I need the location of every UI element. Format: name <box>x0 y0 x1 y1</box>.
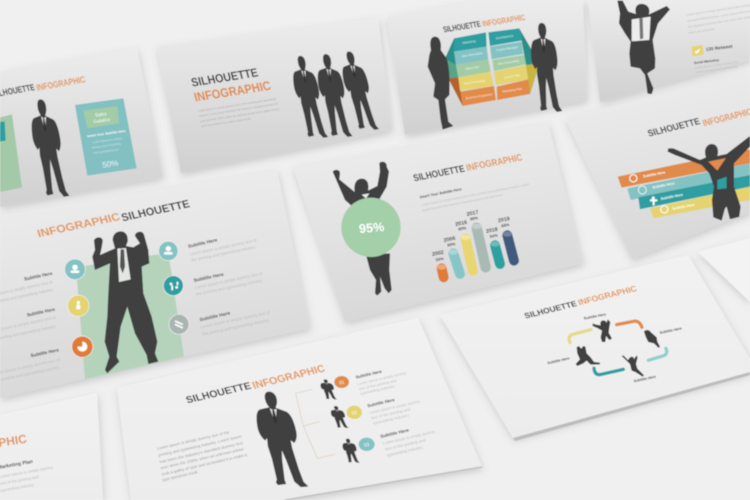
chart labels: years and percentages: 80% <box>458 225 467 232</box>
diagram: stacked coloured blocks: Development <box>496 34 514 40</box>
arrows: four rounded connectors <box>569 321 667 375</box>
chart labels: years and percentages: 2016 <box>455 220 468 228</box>
silhouette: woman <box>428 37 453 129</box>
panel: slide with marketing plan, bottom left <box>0 393 103 500</box>
title: silhouette infographic two-line <box>189 65 272 105</box>
title: infographic silhouette: SILHOUETTE <box>120 198 191 224</box>
panel: blank slide corner, far right <box>698 238 750 302</box>
text block: social marketing <box>694 58 738 74</box>
title: silhouette infographic <box>0 74 87 99</box>
text blocks: right column: Subtitle Here <box>193 272 225 283</box>
text block: and scrambled it to make a type book <box>201 116 251 128</box>
text blocks: right column: Lorem Ipsum is simply dummy text of <box>195 271 263 290</box>
title: silhouette infographic: SILHOUETTE <box>412 164 467 184</box>
chart labels: years and percentages: 66% <box>501 222 510 228</box>
text block: and typesetting industry. Lorem Ipsum has been <box>687 9 750 23</box>
text block: paragraph: Lorem Ipsum is simply dummy text of the <box>156 429 230 451</box>
text block: marketing plan: text of the printing and <box>0 474 39 486</box>
text block: insert your subtitle: Ipsum has been the industry's standard dummy text ever since <box>422 193 503 212</box>
card: green <box>0 114 22 192</box>
chart labels: years and percentages: 2019 <box>498 216 510 224</box>
diagram: stacked coloured blocks: Marketing <box>462 39 476 45</box>
panel: slide with cycle of jumping men, bottom right <box>440 255 750 441</box>
option 03: Subtitle Here <box>380 427 410 439</box>
chart: cylinder bars <box>437 224 514 277</box>
ribbons: four coloured bands <box>618 149 750 218</box>
diagram: stacked coloured blocks: Idea Generation <box>461 51 483 58</box>
panel: slide with victorious man, left <box>0 170 310 398</box>
option 03: Lorem Ipsum is simply dummy <box>382 429 435 446</box>
card: teal with 50%: Galatics <box>93 117 111 124</box>
silhouette: large standing man <box>250 390 309 488</box>
text blocks: right column: Subtitle Here <box>199 310 231 322</box>
panel: slide with standing man and three options, bottom centre <box>117 318 482 500</box>
title: infographic silhouette <box>36 198 191 240</box>
chart labels: years and percentages: 2002 <box>432 250 444 258</box>
text block: marketing plan: typesetting industry <box>0 482 34 493</box>
title: silhouette infographic: INFOGRAPHIC <box>481 12 526 29</box>
text block: paragraph: took a galley of type and scrambled it to make a <box>161 452 248 477</box>
card: teal with 50% <box>75 98 137 176</box>
option 01: text of the printing and <box>359 379 397 391</box>
option 03: typesetting industry <box>386 445 423 458</box>
title: silhouette infographic <box>442 12 526 34</box>
title: silhouette infographic: SILHOUETTE <box>442 19 482 34</box>
option 02: text of the printing and <box>371 407 411 420</box>
text block: insert your subtitle: Insert Your Subtitle Here <box>419 187 462 199</box>
panel: slide with pyramid blocks, top centre <box>387 0 587 135</box>
chart: green circle 95% <box>341 198 401 257</box>
text blocks: left column: Subtitle Here <box>24 271 53 282</box>
silhouette: three men <box>288 51 379 138</box>
chart labels: years and percentages: 50% <box>435 256 444 262</box>
option 02: typesetting industry <box>373 413 409 426</box>
option 01: 01 <box>339 379 345 386</box>
title: silhouette infographic two-line: INFOGRAPHIC <box>192 79 272 105</box>
bracket connector lines <box>296 389 335 458</box>
text blocks: right column: the printing and typesetting industry. <box>202 317 270 337</box>
diagram: stacked coloured blocks: Idea Generating <box>498 59 520 66</box>
option 03: text of the printing and <box>384 437 426 452</box>
title: silhouette infographic: INFOGRAPHIC <box>251 364 327 392</box>
title: silhouette infographic two-line: SILHOUETTE <box>189 65 260 90</box>
text blocks: right column <box>187 237 271 337</box>
option 01 <box>319 369 407 400</box>
text block: paragraph: ever since the 1500s, when an unknown printer <box>160 446 245 470</box>
silhouette: man with fists raised <box>92 231 158 373</box>
chart labels: years and percentages: 60% <box>447 241 456 248</box>
option 02: 02 <box>351 410 358 416</box>
text blocks: right column: Lorem Ipsum is simply dummy text of <box>200 310 271 329</box>
text block: when an unknown <box>688 27 715 35</box>
labels: subtitle here: Subtitle Here <box>583 312 606 321</box>
option 03 <box>341 427 435 463</box>
title: silhouette infographic: SILHOUETTE <box>523 299 579 321</box>
option 01: Subtitle Here <box>355 369 383 380</box>
diagram: stacked coloured blocks: Sales Plan <box>465 65 480 71</box>
silhouette: man with raised fists <box>333 162 392 296</box>
title: silhouette infographic <box>523 283 638 321</box>
title: silhouette infographic: INFOGRAPHIC <box>576 283 638 307</box>
panel: slide with colour ribbons, right <box>565 72 750 259</box>
text block: the standard dummy text ever since the 1500s <box>687 15 750 29</box>
title: silhouette infographic: SILHOUETTE <box>184 381 253 406</box>
text block: ever since the 1500s, when an unknown printer took a galley of type <box>200 107 280 123</box>
text blocks: right column: Subtitle Here <box>187 237 218 249</box>
green background strip <box>76 253 184 379</box>
ribbons: four coloured bands: Subtitle Here <box>652 181 675 190</box>
labels: subtitle here: Subtitle Here <box>633 375 656 383</box>
text block: marketing plan <box>0 459 53 493</box>
text blocks: right column: Lorem Ipsum is simply dummy text of <box>189 237 258 257</box>
chart labels: years and percentages: 95% <box>470 215 479 222</box>
text block: social marketing: Lorem Ipsum is simply dummy text <box>695 60 738 70</box>
title: silhouette infographic <box>412 153 524 184</box>
silhouette: jumping man <box>617 1 670 94</box>
chart labels: years and percentages: 2018 <box>486 227 498 235</box>
text blocks: right column: the printing and typesetting industry. <box>196 278 263 297</box>
text block: social marketing: Social Marketing <box>694 58 719 65</box>
diagram: stacked coloured blocks <box>445 28 539 106</box>
title: infographic silhouette: INFOGRAPHIC <box>36 211 122 240</box>
panel: slide with 95% circle and cylinder chart, centre <box>293 123 583 322</box>
card: teal with 50%: dummy text of printing <box>92 142 122 150</box>
option 02 <box>329 397 421 428</box>
labels: subtitle here: Subtitle Here <box>659 326 682 335</box>
card: teal with 50%: 50% <box>102 159 119 170</box>
text block: Lorem Ipsum is simply dummy text of the printing and typesetting <box>198 97 277 113</box>
option 01: typesetting industry <box>360 384 395 396</box>
option 02: Subtitle Here <box>367 397 396 408</box>
text block: industry. Lorem Ipsum has been the industry's standard dummy text <box>199 101 279 118</box>
title: silhouette infographic: INFOGRAPHIC <box>465 153 524 174</box>
card: teal with 50%: Lorem Ipsum is simply <box>92 136 123 144</box>
card: teal with 50%: Insert Your Subtitle Here <box>87 129 126 138</box>
option 03: 03 <box>364 442 370 448</box>
option 02: Lorem Ipsum is simply dummy <box>369 399 421 415</box>
chart: green circle 95%: 95% <box>358 220 385 236</box>
ribbons: four coloured bands: Subtitle Here <box>643 170 666 179</box>
chart labels: years and percentages <box>432 210 510 262</box>
labels: subtitle here <box>547 312 682 383</box>
text block: insert your subtitle: Lorem Ipsum is simply dummy text of the printing and typesetting industry. Lorem <box>421 182 530 207</box>
silhouette: man leaping with arms wide <box>668 136 750 221</box>
text block: paragraph: type specimen book <box>162 469 198 482</box>
text blocks: left column: Subtitle Here <box>26 307 56 318</box>
panel: slide with three men, top <box>157 18 392 173</box>
text block: Lorem Ipsum is simply dummy text of the printing <box>686 3 750 17</box>
title: silhouette infographic: SILHOUETTE <box>646 116 701 139</box>
chart labels: years and percentages: 2017 <box>466 210 479 218</box>
panel: slide with jumping man and retweet, top right <box>588 0 750 102</box>
chart labels: years and percentages: 54% <box>489 232 498 239</box>
diagram: stacked coloured blocks: Marketing Plan <box>502 87 523 94</box>
text blocks: left column: Subtitle Here <box>30 347 60 358</box>
text blocks: left column <box>0 271 61 383</box>
text block <box>198 97 280 128</box>
text block: paragraph: has been the industry's standard dummy text <box>159 440 244 464</box>
title: silhouette infographic: INFOGRAPHIC <box>35 74 87 93</box>
panel: slide with sales cards, top left <box>0 48 163 207</box>
icons: six round markers <box>65 241 189 357</box>
text blocks: right column: the printing and typesetting industry. <box>191 244 256 263</box>
labels: subtitle here: Subtitle Here <box>547 356 570 365</box>
card: teal with 50%: Sales <box>95 111 108 118</box>
ribbons: four coloured bands: Subtitle Here <box>672 203 695 211</box>
text block: paragraph: printing and typesetting industry. Lorem Ipsum <box>158 433 243 458</box>
diagram: stacked coloured blocks: Project Manager <box>496 45 518 52</box>
diagram: stacked coloured blocks: Launch Plan <box>504 73 521 80</box>
text block: marketing plan: Lorem Ipsum is simply dummy <box>0 465 53 479</box>
label: 130 retweet: 130 Retweet <box>705 44 733 52</box>
text block: paragraph <box>156 429 248 482</box>
chart labels: years and percentages: 2006 <box>443 236 456 244</box>
silhouettes: four jumping men <box>576 319 660 377</box>
card: teal with 50%: and typesetting text <box>93 147 119 155</box>
title: silhouette infographic <box>184 364 327 406</box>
diagram: stacked coloured blocks: Business Expansion <box>466 92 493 100</box>
text block: social marketing: of the printing and typesetting <box>696 64 738 74</box>
title: silhouette infographic <box>646 107 750 139</box>
icon: yellow social square <box>692 45 704 56</box>
ribbons: four coloured bands: Subtitle Here <box>660 193 683 201</box>
silhouette: man <box>529 22 562 112</box>
text block <box>686 3 750 35</box>
diagram: stacked coloured blocks: Idea Generating <box>464 78 486 86</box>
option 01: Lorem Ipsum is simply dummy <box>357 371 407 386</box>
silhouette: standing man <box>27 98 70 197</box>
